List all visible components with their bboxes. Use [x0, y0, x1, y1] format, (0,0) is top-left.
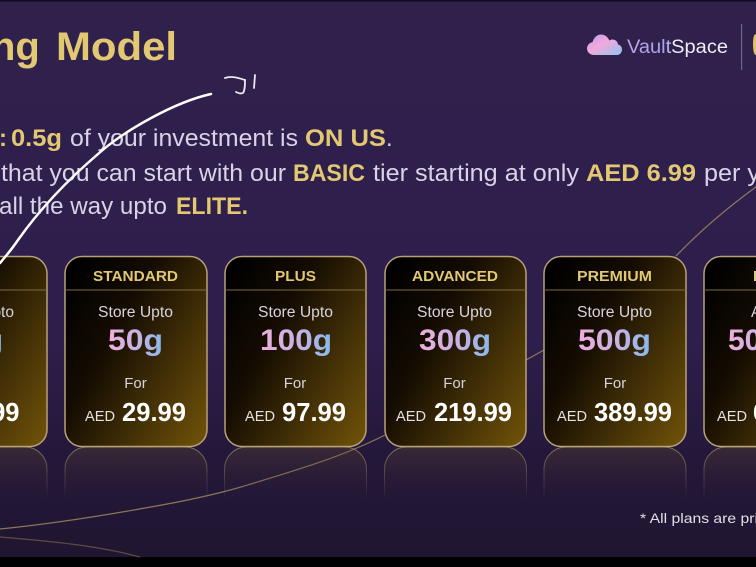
card: ADVANCED: AED	[396, 408, 426, 425]
tier name: PREMIUM	[577, 268, 652, 285]
card: ELITE (cropped): AED	[717, 408, 747, 425]
card: ADVANCED	[385, 256, 526, 446]
line 3: ELITE.	[176, 193, 248, 220]
line 2: BASIC	[293, 160, 365, 187]
line 1: 0.5g	[11, 125, 62, 152]
card: STANDARD: AED	[85, 408, 115, 425]
card: PLUS: 100g	[260, 324, 332, 357]
storage: Store Upto	[417, 304, 492, 321]
price: For	[284, 375, 306, 392]
handwritten initials	[225, 75, 255, 93]
line 2: per y	[704, 160, 756, 187]
brand name: VaultSpace	[627, 37, 728, 58]
footnote: * All plans are pri	[640, 510, 756, 526]
card: PREMIUM	[544, 256, 686, 446]
line 2: AED 6.99	[586, 160, 696, 187]
card: ADVANCED: 219.99	[434, 399, 512, 427]
partner logo fragment	[753, 34, 756, 55]
card: PREMIUM: AED	[557, 408, 587, 425]
line 2: tier starting at only	[373, 160, 579, 187]
storage: Store Upto	[98, 304, 173, 321]
card: STANDARD	[65, 256, 207, 446]
logo: VaultSpace	[587, 24, 756, 70]
line 1: .	[386, 125, 393, 152]
intro text	[0, 125, 756, 220]
tier name: PLUS	[275, 268, 316, 285]
card: STANDARD: 50g	[108, 324, 163, 357]
arrow stroke	[0, 94, 211, 263]
decorative gold curves	[0, 184, 756, 557]
price: For	[124, 375, 147, 392]
price: For	[604, 375, 626, 392]
title	[0, 25, 177, 69]
price: For	[443, 375, 466, 392]
storage: Store Upto	[577, 304, 652, 321]
tier name: STANDARD	[93, 268, 178, 285]
card: ELITE (cropped)	[704, 256, 756, 446]
title: Model	[56, 25, 177, 69]
card: PLUS: 97.99	[282, 399, 346, 427]
handwritten annotation stroke	[0, 75, 255, 263]
line 3	[0, 193, 248, 220]
tier name: ADVANCED	[412, 268, 498, 285]
card: PLUS	[225, 256, 366, 446]
card: PREMIUM: 389.99	[594, 399, 672, 427]
card: PLUS: AED	[245, 408, 275, 425]
storage: Store Upto	[258, 304, 333, 321]
line 2	[1, 160, 756, 187]
line 1: of your investment is	[70, 125, 298, 152]
card: PREMIUM: 500g	[578, 324, 651, 357]
icon: cloud	[587, 34, 622, 55]
card: STANDARD: 29.99	[122, 399, 186, 427]
line 1	[0, 125, 393, 152]
card: BASIC (cropped)	[0, 256, 47, 446]
line 2: that you can start with our	[1, 160, 286, 187]
line 1: ON US	[305, 125, 386, 152]
card: ADVANCED: 300g	[419, 324, 491, 357]
card reflections	[0, 447, 756, 507]
line 3: all the way upto	[0, 193, 167, 220]
